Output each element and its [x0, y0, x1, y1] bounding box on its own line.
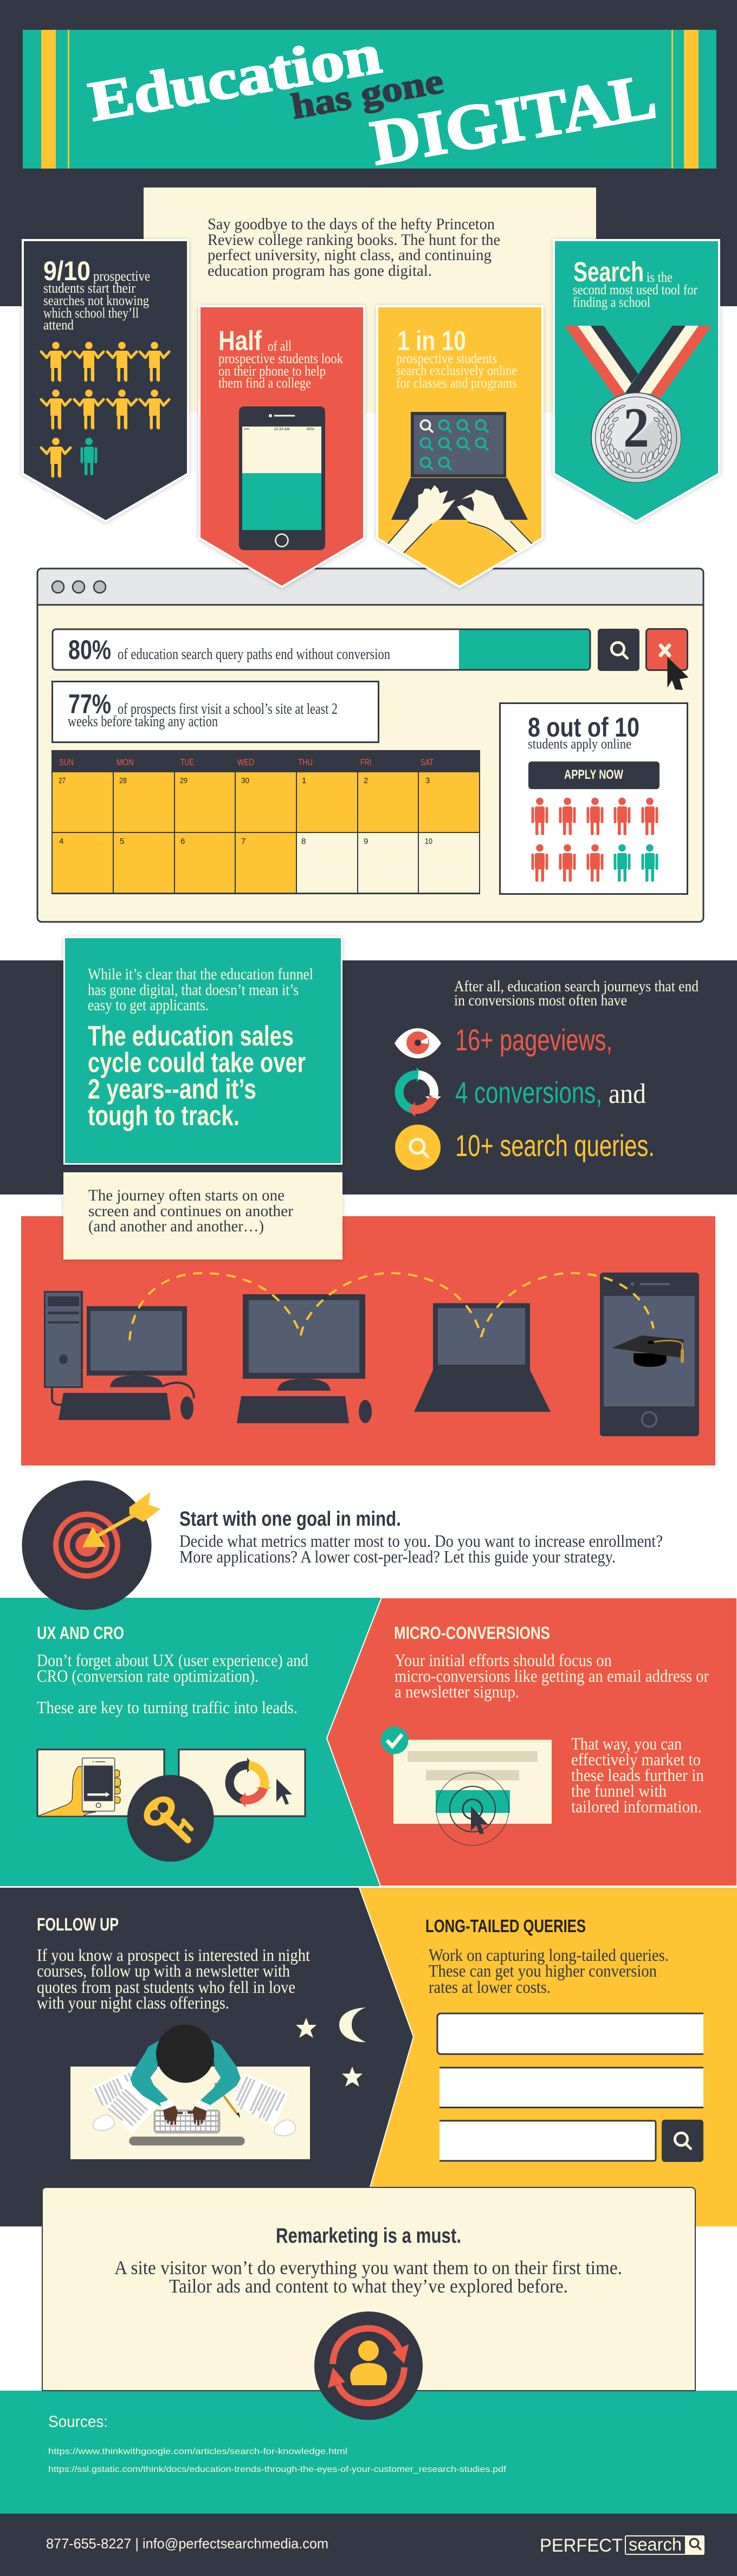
panel: follow up: [37, 1914, 366, 2159]
panel: remarketing: [42, 2187, 695, 2420]
panel: long-tailed queries: rates at lower costs.: [429, 1977, 551, 1997]
icon: returning visitor: [314, 2312, 423, 2420]
search field: [439, 2067, 703, 2108]
dashed arrows: [130, 1273, 654, 1340]
cursor: [668, 657, 689, 690]
banner: 9/10: students start their: [43, 280, 135, 296]
banner: 9/10: 9/10: [43, 256, 90, 286]
banner: 1 in 10: 1 in 10: [397, 325, 466, 356]
calendar numbers: 7: [241, 837, 245, 846]
title word: DIGITAL: DIGITAL: [366, 60, 661, 179]
icon: search circle: [395, 1125, 441, 1170]
funnel text: While it’s clear that the education funnel: [88, 965, 313, 983]
calendar numbers: 30: [241, 776, 249, 785]
panel: UX and CRO: Don’t forget about UX (user experience) and: [37, 1650, 308, 1670]
dark band section: [0, 960, 737, 1195]
panel: long-tailed queries: Work on capturing long-tailed queries.: [429, 1945, 669, 1965]
device: phone: [600, 1273, 699, 1436]
stat: conversions: and: [609, 1079, 646, 1109]
banner: Search: is the: [647, 269, 673, 285]
calendar weekdays: THU: [298, 757, 313, 767]
banner: 9/10: prospective: [93, 268, 150, 284]
apply button: [528, 761, 660, 789]
icon: key: [127, 1775, 214, 1862]
panel: sales cycle: [64, 938, 341, 1164]
icon: phone: ••••: [244, 428, 249, 431]
apply panel: students apply online: [528, 736, 631, 752]
title word: Education: Education: [85, 23, 385, 133]
logo: PERFECT: [540, 2535, 623, 2556]
logo: search: [629, 2534, 682, 2554]
search bar stat 80%: [53, 629, 590, 670]
icon: eye: [395, 1028, 441, 1058]
apply panel: [500, 703, 687, 894]
calendar numbers: 29: [180, 776, 188, 785]
panel: micro-conversions: the funnel with: [571, 1781, 667, 1800]
banner: Half: on their phone to help: [218, 363, 326, 379]
apply panel: 8 out of 10: [528, 712, 639, 743]
window dots: [52, 581, 106, 593]
device: laptop: [414, 1303, 551, 1412]
stat box 77%: weeks before taking any action: [68, 713, 218, 730]
banner: 1 in 10: prospective students: [396, 351, 497, 366]
sales cycle headline: The education sales: [88, 1021, 294, 1052]
panel: UX and CRO: UX AND CRO: [37, 1623, 124, 1643]
banner: Half: prospective students look: [218, 351, 343, 366]
goal heading and text: More applications? A lower cost-per-lead? Let this guide your strategy.: [179, 1547, 616, 1566]
calendar weekdays: WED: [237, 757, 254, 767]
panel: micro-conversions: effectively market to: [571, 1749, 701, 1769]
panel: UX and CRO: [37, 1623, 308, 1862]
calendar numbers: 5: [120, 837, 124, 846]
banner: 1 in 10: [377, 306, 542, 587]
panel: remarketing: A site visitor won’t do everything you want them to on their first time.: [114, 2257, 622, 2278]
banner: Search: second most used tool for: [573, 282, 697, 298]
panel: follow up: courses, follow up with a newsletter with: [37, 1961, 290, 1980]
sales cycle headline: [88, 1021, 306, 1132]
sales cycle headline: cycle could take over: [88, 1047, 306, 1079]
banner: Half: Half: [218, 325, 262, 356]
panel: follow up: FOLLOW UP: [37, 1914, 119, 1934]
icon: cycle: [399, 1067, 441, 1117]
panel: journey text: [63, 1172, 342, 1260]
panel: long-tailed queries: [425, 1916, 703, 2162]
panel: follow up: quotes from past students who fell in love: [37, 1977, 295, 1997]
calendar numbers: 3: [425, 776, 430, 785]
stat: search queries: 10+ search queries.: [455, 1128, 655, 1163]
icon: cycle with cursor: [179, 1749, 305, 1816]
banner: Search: Search: [573, 256, 644, 287]
icon: laptop with search grid: [388, 412, 532, 553]
panel: micro-conversions: MICRO-CONVERSIONS: [394, 1623, 550, 1643]
intro text: education program has gone digital.: [208, 262, 432, 280]
calendar weekdays: MON: [117, 757, 134, 767]
illustration: person at desk: [70, 2025, 310, 2159]
icon: signup form: [380, 1727, 552, 1845]
sales cycle headline: 2 years--and it’s: [88, 1074, 256, 1105]
stats intro text: in conversions most often have: [454, 992, 627, 1009]
icon: hand holding phone: [37, 1749, 164, 1816]
stat: conversions: 4 conversions,: [455, 1075, 602, 1109]
banner: Search: finding a school: [573, 294, 650, 310]
icon: medal: [565, 326, 712, 482]
contact details: 877-655-8227 | info@perfectsearchmedia.com: [46, 2535, 328, 2552]
search field with button: [439, 2120, 703, 2162]
calendar numbers: [59, 776, 432, 846]
stats intro text: [454, 978, 699, 1009]
calendar numbers: 28: [119, 776, 127, 785]
calendar numbers: 9: [364, 837, 368, 846]
funnel text: has gone digital, that doesn’t mean it’s: [88, 981, 299, 999]
calendar weekdays: FRI: [360, 757, 371, 767]
logo: [540, 2534, 704, 2556]
stat box 77%: of prospects first visit a school’s site at least 2: [118, 701, 338, 718]
banner: 9/10: which school they’ll: [43, 305, 139, 321]
intro panel: [144, 188, 596, 413]
calendar numbers: 4: [59, 837, 63, 846]
panel: journey text: (and another and another…): [88, 1217, 264, 1235]
icon: phone: [239, 406, 325, 550]
banner: Search: [554, 240, 719, 521]
banner: Half: [199, 306, 364, 587]
icon: medal: 2: [623, 396, 649, 459]
panel: micro-conversions: a newsletter signup.: [395, 1682, 519, 1701]
apply button: APPLY NOW: [564, 767, 623, 782]
title banner: [23, 23, 716, 179]
banner: 1 in 10: for classes and programs: [396, 375, 517, 391]
top background: [0, 0, 737, 306]
sources band: [0, 2391, 737, 2514]
panel: journey text: screen and continues on another: [88, 1202, 293, 1220]
close button: [646, 629, 687, 670]
sales cycle headline: tough to track.: [88, 1100, 240, 1132]
device: desktop tower: [44, 1291, 194, 1420]
calendar cells: [53, 772, 479, 893]
intro text: [208, 215, 500, 280]
icon: graduation cap: [612, 1335, 684, 1367]
stat box 77%: 77%: [68, 689, 111, 719]
icon: check badge: [380, 1727, 409, 1754]
icon: phone: 10:33 AM: [274, 428, 290, 431]
goal heading and text: Start with one goal in mind.: [179, 1508, 401, 1531]
banner: Half: them find a college: [218, 375, 311, 391]
panel: remarketing: Tailor ads and content to what they’ve explored before.: [169, 2275, 568, 2297]
calendar numbers: 6: [180, 837, 185, 846]
panel: micro-conversions: [380, 1623, 709, 1845]
panel: UX and CRO: CRO (conversion rate optimization).: [37, 1666, 258, 1686]
funnel text: easy to get applicants.: [88, 996, 209, 1014]
stats intro text: After all, education search journeys that end: [454, 978, 699, 995]
people icons: [531, 798, 658, 882]
panel: micro-conversions: That way, you can: [571, 1734, 682, 1753]
title words: has gone: has gone: [288, 61, 446, 127]
goal heading and text: Decide what metrics matter most to you. Do you want to increase enrollment?: [179, 1531, 663, 1551]
panel: follow up: with your night class offerings.: [37, 1993, 229, 2012]
panel: micro-conversions: these leads further in: [571, 1765, 704, 1785]
panel: journey text: The journey often starts on one: [88, 1186, 285, 1204]
search bar stat 80%: 80%: [68, 635, 111, 665]
calendar weekdays: SAT: [421, 757, 434, 767]
panel: devices: [21, 1216, 715, 1465]
calendar numbers: 1: [302, 776, 306, 785]
calendar numbers: 8: [301, 837, 306, 846]
icon: phone: 85%: [307, 428, 314, 431]
sources: https://www.thinkwithgoogle.com/articles/search-for-knowledge.html: [48, 2447, 347, 2456]
search button: [598, 629, 639, 671]
goal heading and text: [179, 1508, 663, 1566]
sources: https://ssl.gstatic.com/think/docs/education-trends-through-the-eyes-of-your-customer_research-studies.pdf: [48, 2465, 507, 2474]
stat: pageviews: 16+ pageviews,: [455, 1023, 612, 1057]
icon: star: [296, 2018, 316, 2038]
intro text: perfect university, night class, and continuing: [208, 246, 492, 264]
icon: moon: [339, 2007, 366, 2042]
device: desktop monitor: [237, 1294, 372, 1423]
icon: target: [22, 1481, 161, 1610]
sources: [48, 2413, 507, 2474]
banner: 9/10: attend: [43, 317, 74, 333]
calendar numbers: 10: [425, 837, 432, 846]
banner: Half: of all: [268, 338, 292, 354]
people icons: [41, 342, 169, 478]
stat box 77%: [52, 682, 378, 743]
banner: 9/10: [23, 240, 188, 521]
icon: typing hands: [388, 485, 532, 553]
browser window: [37, 569, 703, 922]
panel: follow up: If you know a prospect is interested in night: [37, 1945, 310, 1965]
section backgrounds: dark and yellow: [0, 1888, 737, 2226]
search bar stat 80%: of education search query paths end without conversion: [118, 646, 390, 663]
footer: [0, 2514, 737, 2576]
calendar weekdays: SUN: [59, 757, 74, 767]
intro text: Say goodbye to the days of the hefty Princeton: [208, 215, 495, 233]
panel: micro-conversions: micro-conversions like getting an email address or: [395, 1666, 709, 1686]
panel: micro-conversions: tailored information.: [571, 1797, 702, 1816]
icon: star: [342, 2067, 363, 2087]
calendar numbers: 27: [59, 776, 66, 785]
section backgrounds: teal and red: [0, 1598, 737, 1886]
calendar: [51, 750, 480, 894]
calendar numbers: 2: [364, 776, 368, 785]
panel: long-tailed queries: LONG-TAILED QUERIES: [425, 1916, 586, 1936]
calendar weekdays: [59, 757, 434, 767]
search field: [437, 2013, 703, 2054]
intro text: Review college ranking books. The hunt for the: [208, 231, 500, 249]
panel: UX and CRO: These are key to turning traffic into leads.: [37, 1697, 298, 1717]
calendar weekdays: TUE: [180, 757, 194, 767]
sources: Sources:: [48, 2413, 108, 2431]
funnel text: [88, 965, 313, 1014]
panel: micro-conversions: Your initial efforts should focus on: [395, 1650, 612, 1670]
panel: long-tailed queries: These can get you higher conversion: [429, 1961, 657, 1980]
banner: 1 in 10: search exclusively online: [396, 363, 517, 378]
banner: 9/10: searches not knowing: [43, 293, 149, 308]
panel: remarketing: Remarketing is a must.: [276, 2224, 461, 2248]
